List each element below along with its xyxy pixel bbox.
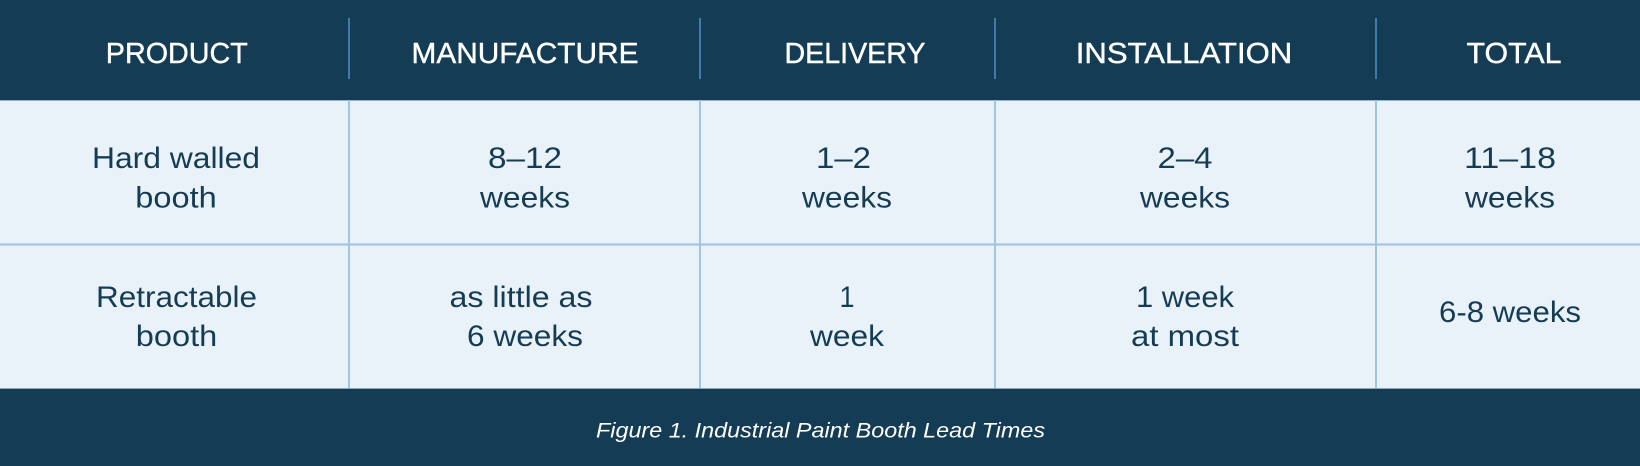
table body — [0, 100, 1640, 388]
cell: manufacture: 8–12 — [488, 142, 562, 175]
cell: product: booth — [136, 320, 217, 353]
cell: total: 11–18 — [1464, 142, 1556, 175]
cell: manufacture: weeks — [479, 182, 570, 214]
cell: product: booth — [135, 182, 217, 214]
cell: total: 6-8 weeks — [1439, 296, 1581, 329]
heading: installation: INSTALLATION — [1076, 38, 1292, 70]
cell: manufacture: 6 weeks — [467, 320, 583, 353]
row: retractable booth — [96, 281, 1581, 353]
caption: Figure 1. Industrial Paint Booth Lead Times — [596, 418, 1045, 442]
heading: manufacture: MANUFACTURE — [412, 38, 638, 70]
cell: product: Hard walled — [92, 142, 260, 175]
cell: installation: weeks — [1139, 182, 1230, 214]
row: hard walled booth — [92, 142, 1556, 214]
cell: delivery: weeks — [801, 182, 892, 214]
cell: delivery: week — [809, 320, 885, 353]
cell: total: weeks — [1464, 182, 1555, 214]
cell: delivery: 1 — [840, 281, 854, 314]
cell: product: Retractable — [96, 281, 257, 314]
cell: installation: 1 week — [1136, 281, 1235, 314]
cell: installation: 2–4 — [1158, 142, 1212, 175]
heading: product: PRODUCT — [106, 38, 248, 70]
heading: delivery: DELIVERY — [784, 38, 926, 70]
cell: manufacture: as little as — [450, 281, 592, 314]
heading: total: TOTAL — [1466, 38, 1562, 70]
cell: delivery: 1–2 — [816, 142, 871, 175]
footer band with caption — [0, 388, 1640, 466]
cell: installation: at most — [1131, 320, 1240, 353]
header band — [0, 0, 1640, 100]
